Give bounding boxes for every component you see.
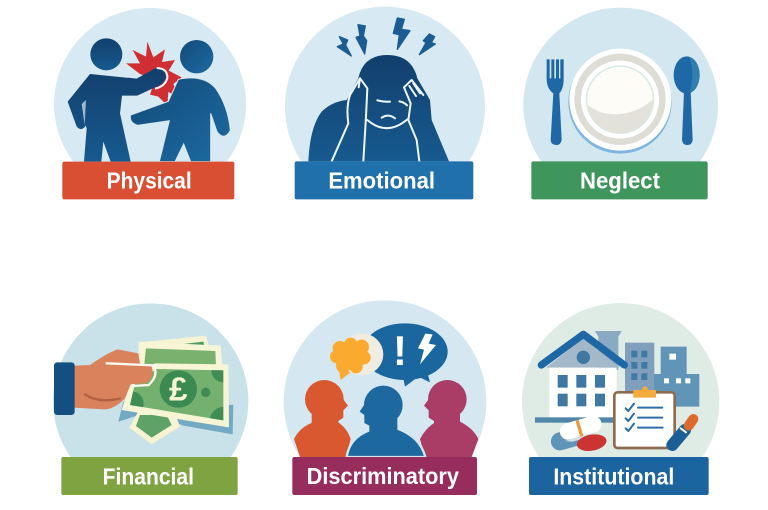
panel: neglect xyxy=(523,8,718,202)
icon: clipboard xyxy=(614,386,675,448)
pound sign: £ xyxy=(169,371,188,408)
label: Discriminatory xyxy=(292,457,477,495)
icon: banknotes xyxy=(118,336,237,444)
icon: attacker figure xyxy=(68,38,167,162)
label: Institutional xyxy=(529,457,709,495)
icon: pills xyxy=(547,414,608,453)
panel: physical xyxy=(54,8,246,200)
panel: discriminatory xyxy=(284,300,486,503)
icon: hand xyxy=(74,349,155,409)
label: Emotional: Emotional xyxy=(328,167,435,193)
icon: house xyxy=(535,334,624,423)
panel: institutional xyxy=(522,303,719,500)
label: Physical: Physical xyxy=(107,167,192,193)
icon: marker xyxy=(672,419,693,445)
label: Financial: Financial xyxy=(103,463,194,489)
icon: spoon xyxy=(674,56,700,145)
icon: background buildings xyxy=(595,331,699,409)
label: Neglect: Neglect xyxy=(580,167,660,193)
icon: maroon person xyxy=(420,380,478,457)
label: Financial xyxy=(61,457,238,495)
icon: distressed person xyxy=(308,55,449,161)
label: Physical xyxy=(62,162,234,199)
label: Emotional xyxy=(295,161,473,199)
icon: speech bubble: ! xyxy=(393,327,407,374)
icon: fork xyxy=(547,59,564,145)
panel: financial xyxy=(53,303,248,499)
icon: thought bubble xyxy=(330,333,383,380)
icon: cuff xyxy=(54,362,75,415)
icon: blue person xyxy=(347,386,425,457)
label: Discriminatory: Discriminatory xyxy=(307,463,459,489)
icon: speech bubble xyxy=(362,323,448,387)
icon: orange person xyxy=(294,380,351,457)
icon: victim figure xyxy=(130,40,230,162)
label: Institutional: Institutional xyxy=(553,463,674,489)
icon: lightning bolts xyxy=(337,18,435,56)
icon: impact starburst xyxy=(126,42,182,105)
icon: plate xyxy=(568,49,672,154)
label: Neglect xyxy=(531,161,708,199)
panel: emotional xyxy=(285,7,485,207)
